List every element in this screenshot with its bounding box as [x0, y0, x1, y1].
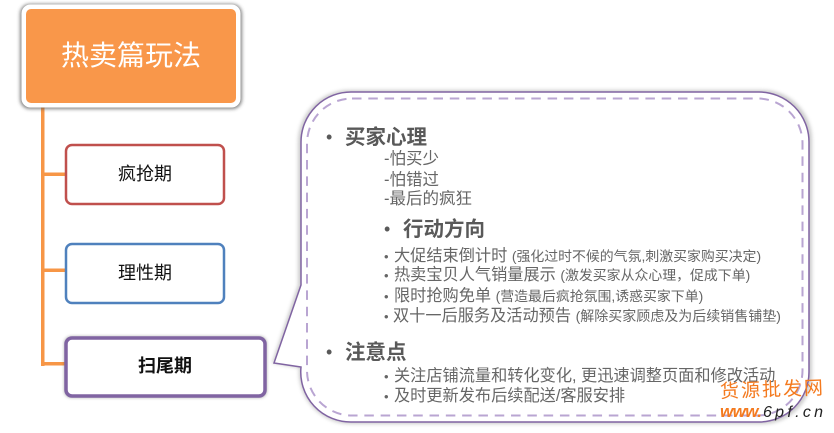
node: 扫尾期 (active): 扫尾期: [138, 356, 192, 376]
connector: tree lines: [41, 106, 65, 366]
node: 疯抢期: [66, 145, 224, 204]
section: 行动方向: 限时抢购免单 (营造最后疯抢氛围,诱惑买家下单): [394, 287, 703, 305]
section: 买家心理: •: [326, 127, 332, 147]
section: 注意点: •: [384, 369, 389, 384]
node: 疯抢期: 疯抢期: [118, 164, 172, 184]
section: 行动方向: •: [384, 268, 389, 283]
section: 行动方向: 行动方向: [403, 217, 485, 241]
section: 注意点: 注意点: [345, 340, 406, 364]
section: 买家心理: -最后的疯狂: [384, 189, 472, 208]
section: 行动方向: [384, 217, 781, 325]
node: 理性期: [66, 244, 224, 303]
section: 买家心理: 买家心理: [345, 125, 427, 149]
node: 理性期: 理性期: [118, 263, 172, 283]
section: 行动方向: •: [384, 219, 390, 239]
title box: [20, 4, 242, 109]
section: 行动方向: 大促结束倒计时 (强化过时不候的气氛,刺激买家购买决定): [394, 247, 761, 265]
section: 买家心理: -怕买少: [384, 149, 439, 168]
watermark: 6pf.cn: [763, 404, 823, 421]
section: 买家心理: -怕错过: [384, 170, 439, 189]
callout panel: [272, 90, 812, 424]
section: 行动方向: •: [384, 249, 389, 264]
section: 行动方向: 双十一后服务及活动预告 (解除买家顾虑及为后续销售铺垫): [393, 307, 781, 325]
watermark: [720, 377, 823, 421]
section: 注意点: 及时更新发布后续配送/客服安排: [394, 387, 625, 405]
title box: 热卖篇玩法: [61, 40, 201, 71]
watermark: www.: [720, 402, 762, 421]
section: 行动方向: •: [384, 289, 389, 304]
section: 行动方向: 热卖宝贝人气销量展示 (激发买家从众心理，促成下单): [394, 266, 750, 284]
section: 买家心理: [326, 125, 472, 208]
section: 注意点: [326, 340, 775, 405]
section: 注意点: •: [326, 342, 332, 362]
watermark: 货源批发网: [720, 377, 823, 403]
section: 注意点: •: [384, 389, 389, 404]
section: 注意点: 关注店铺流量和转化变化, 更迅速调整页面和修改活动: [394, 367, 775, 385]
node: 扫尾期 (active): [65, 337, 266, 397]
section: 行动方向: •: [384, 309, 389, 324]
